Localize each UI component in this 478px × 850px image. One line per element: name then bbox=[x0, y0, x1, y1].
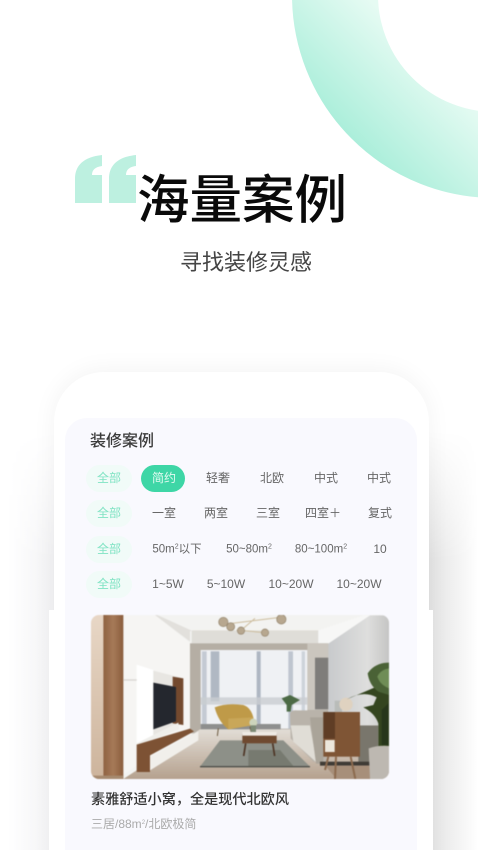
tv niche bbox=[153, 671, 174, 734]
budget filter row bbox=[97, 577, 382, 591]
floor plant bbox=[347, 687, 389, 749]
white shelf bbox=[137, 723, 179, 745]
area filter row: 50m2以下 bbox=[152, 543, 202, 555]
floor right bbox=[325, 766, 370, 779]
style filter row bbox=[97, 465, 391, 492]
left side shadow bbox=[37, 515, 54, 850]
window and curtains bbox=[201, 650, 307, 729]
radiator bbox=[315, 658, 328, 709]
phone lower body bbox=[49, 610, 433, 850]
living room photo bbox=[90, 614, 390, 780]
dark base bbox=[320, 762, 370, 766]
case title: 素雅舒适小窝，全是现代北欧风 bbox=[91, 791, 289, 807]
area filter row: 全部 bbox=[97, 542, 121, 556]
area filter row bbox=[97, 542, 387, 556]
rug bbox=[200, 740, 310, 767]
table flowers bbox=[249, 719, 257, 727]
decorative ring bbox=[292, 0, 478, 198]
filter chips bbox=[97, 465, 392, 591]
style filter row: 中式 bbox=[314, 471, 338, 485]
panel: case listing bbox=[65, 418, 417, 850]
case details: 三居/88m2/北欧极简 bbox=[91, 817, 196, 831]
room filter row: 三室 bbox=[256, 506, 280, 520]
decor on cabinet bbox=[335, 701, 342, 712]
room filter row: 四室＋ bbox=[305, 506, 341, 520]
sofa bbox=[290, 710, 327, 762]
wood column bbox=[103, 615, 123, 779]
armchair bbox=[215, 704, 254, 729]
tv bbox=[153, 683, 176, 729]
left strip bbox=[91, 615, 103, 779]
room filter row: 复式 bbox=[368, 506, 392, 520]
white wall cabinet bbox=[123, 615, 190, 775]
budget filter row: 1~5W bbox=[152, 577, 184, 591]
area filter row: 50~80m2 bbox=[226, 543, 272, 555]
ceiling beam bbox=[318, 615, 370, 644]
style filter row: 简约 bbox=[152, 471, 176, 485]
area filter row: 80~100m2 bbox=[295, 543, 347, 555]
budget filter row: 5~10W bbox=[207, 577, 245, 591]
title: 海量案例 bbox=[137, 171, 347, 230]
quote mark icon bbox=[75, 155, 136, 203]
area filter row: 10 bbox=[373, 542, 387, 556]
back wall bbox=[190, 643, 328, 733]
room base bbox=[124, 615, 361, 778]
right wall bbox=[328, 615, 389, 725]
chandelier bbox=[219, 615, 286, 636]
phone mockup bbox=[54, 372, 429, 850]
right side shadow bbox=[429, 470, 464, 850]
wood side cabinet bbox=[323, 712, 360, 757]
budget filter row: 全部 bbox=[97, 577, 121, 591]
style filter row: 全部 bbox=[97, 471, 121, 485]
tv console bbox=[137, 729, 194, 772]
section heading: 装修案例 bbox=[90, 433, 154, 450]
budget filter row: 10~20W bbox=[268, 577, 314, 591]
subtitle: 寻找装修灵感 bbox=[180, 250, 312, 275]
window plant bbox=[282, 695, 300, 712]
room filter row: 一室 bbox=[152, 506, 176, 520]
style filter row: 北欧 bbox=[260, 471, 284, 485]
white cabinet panel bbox=[137, 665, 153, 743]
style filter row: 轻奢 bbox=[206, 471, 230, 485]
style filter row: 中式 bbox=[367, 471, 391, 485]
plant pot bbox=[369, 746, 389, 779]
room filter row: 两室 bbox=[204, 506, 228, 520]
floor bbox=[123, 729, 389, 779]
ceiling band bbox=[192, 630, 318, 643]
room filter row bbox=[97, 506, 392, 520]
coffee table bbox=[242, 734, 277, 743]
room filter row: 全部 bbox=[97, 506, 121, 520]
budget filter row: 10~20W bbox=[336, 577, 382, 591]
